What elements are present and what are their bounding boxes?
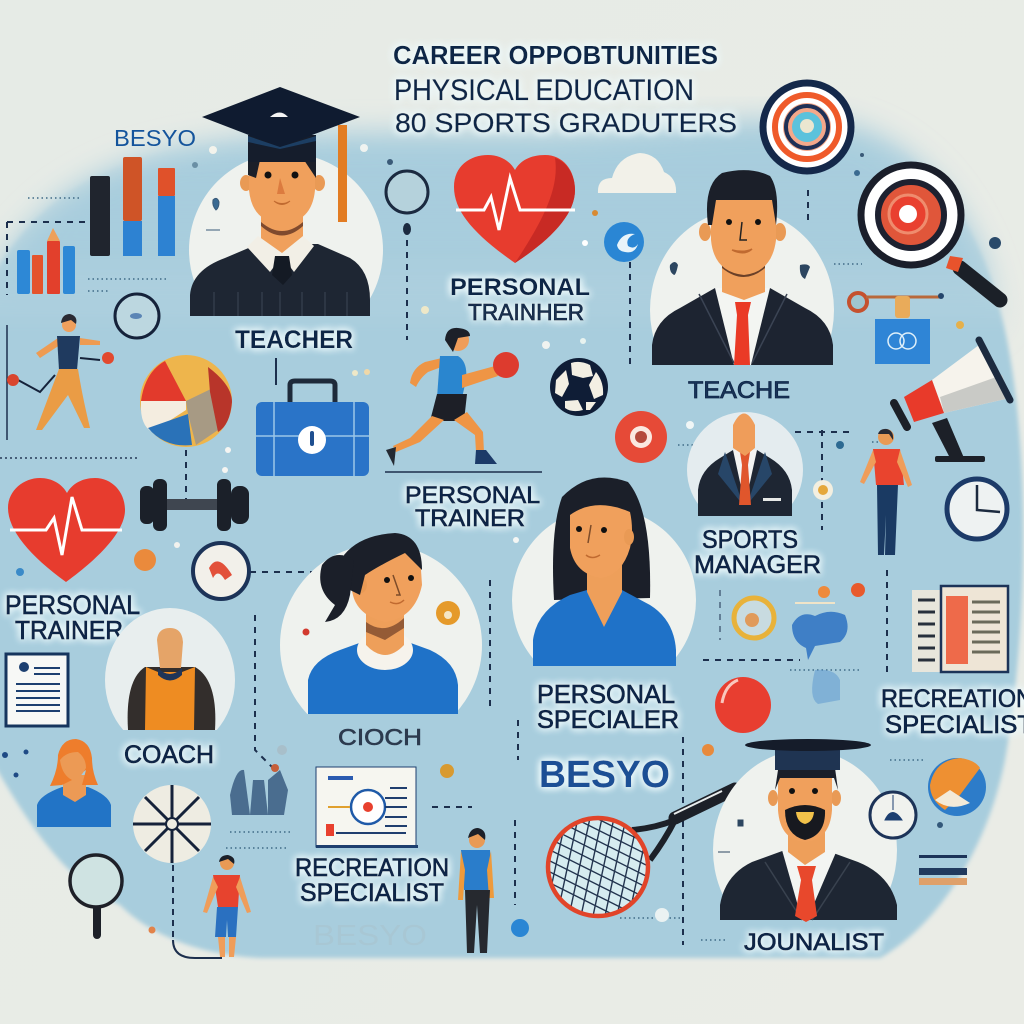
woman with long hair portrait bbox=[512, 478, 696, 666]
figure: kid red shirt bbox=[203, 855, 251, 957]
icon: pale blue shape bbox=[812, 670, 840, 704]
icon: megaphone bbox=[894, 340, 1010, 462]
icon: briefcase bbox=[256, 381, 369, 476]
label: sports manager bbox=[694, 526, 821, 579]
label: personal specialer bbox=[537, 679, 679, 734]
ring icon bbox=[115, 294, 159, 338]
label: personal specialer: PERSONAL bbox=[537, 679, 675, 709]
icon: document panel bbox=[912, 586, 1008, 672]
label: teacher: TEACHER bbox=[235, 326, 353, 354]
icon: magnifier ring bbox=[386, 171, 428, 235]
label: recreation specialist center: RECREATION bbox=[295, 854, 449, 882]
micro text marks bbox=[28, 198, 925, 940]
icon: clipboard bbox=[6, 654, 68, 726]
figure: runner bbox=[386, 328, 519, 466]
label: personal trainer middle: PERSONAL bbox=[405, 482, 540, 509]
figure: blue shirt standing bbox=[458, 828, 494, 953]
decorative specks bbox=[2, 144, 1001, 937]
figure: red shirt standing bbox=[860, 429, 912, 555]
label: sports manager: SPORTS bbox=[702, 526, 798, 554]
title: CAREER OPPOBTUNITIES bbox=[393, 40, 718, 70]
icon: heart left bbox=[8, 478, 125, 582]
woman with ponytail portrait bbox=[280, 533, 482, 714]
journalist portrait bbox=[713, 739, 897, 922]
label: cioch: CIOCH bbox=[338, 724, 422, 750]
label: personal trainer left bbox=[5, 590, 140, 645]
label: personal trainer top: PERSONAL bbox=[450, 274, 590, 301]
label: recreation specialist right bbox=[881, 685, 1024, 739]
icon: blue blob bbox=[792, 612, 848, 660]
label: journalist: JOUNALIST bbox=[744, 929, 884, 956]
label: personal trainer top bbox=[450, 274, 590, 325]
icon: magnifier bottom bbox=[70, 855, 122, 935]
icon: orange dot bbox=[134, 549, 156, 571]
label: personal trainer middle: TRAINER bbox=[415, 505, 525, 532]
teacher graduate portrait bbox=[189, 87, 383, 316]
dashed connectors bbox=[0, 190, 887, 958]
icon: stripes bbox=[919, 855, 967, 885]
icon: blue circle bbox=[604, 222, 644, 262]
label: recreation specialist center: SPECIALIST bbox=[300, 879, 444, 907]
figure with balls bbox=[7, 314, 114, 430]
bar chart: large bbox=[90, 157, 175, 256]
icon: strategy card bbox=[316, 767, 418, 848]
figure: red haired woman bbox=[37, 739, 111, 827]
label: sports manager: MANAGER bbox=[694, 551, 821, 579]
icon: heart top bbox=[454, 155, 575, 263]
bar chart: small bbox=[17, 228, 75, 294]
icon: target top bbox=[763, 83, 851, 171]
label: recreation specialist center bbox=[295, 854, 449, 907]
label: personal trainer top: TRAINHER bbox=[468, 299, 584, 325]
icon: small orange dot bbox=[702, 744, 714, 756]
title: PHYSICAL EDUCATION bbox=[394, 74, 694, 107]
label: personal trainer left: TRAINER bbox=[15, 615, 123, 645]
icon: orange blue ball bbox=[928, 758, 986, 816]
icon: clock bbox=[947, 479, 1007, 539]
icon: basketball bbox=[133, 785, 211, 863]
icon: target magnifier bbox=[861, 165, 1000, 300]
teacher suit portrait bbox=[650, 170, 834, 365]
icon: key and tag bbox=[849, 293, 944, 318]
coach portrait bbox=[105, 608, 235, 730]
icon: football bbox=[550, 358, 608, 416]
label: personal trainer middle bbox=[405, 482, 540, 532]
faint watermark label: BESYO bbox=[313, 920, 427, 952]
icon: dial bottom right bbox=[870, 792, 916, 838]
label: besyo large: BESYO bbox=[539, 754, 670, 796]
icon: dial bbox=[193, 543, 249, 599]
icon: coin bbox=[813, 480, 833, 500]
icon: cloud bbox=[598, 153, 676, 193]
icon: blue square bbox=[875, 319, 930, 364]
BESYO small label: BESYO bbox=[114, 125, 196, 151]
icon: tennis racket bbox=[546, 782, 737, 918]
background blob soft top bbox=[0, 119, 1006, 345]
label: personal trainer left: PERSONAL bbox=[5, 590, 140, 620]
title bbox=[393, 40, 737, 138]
title: 80 SPORTS GRADUTERS bbox=[395, 108, 737, 138]
icon: yellow ring bbox=[734, 598, 774, 638]
icon: dumbbell bbox=[140, 479, 249, 531]
icon: red ball bbox=[715, 677, 771, 733]
icon: orange marks bbox=[795, 583, 865, 603]
icon: red target bbox=[615, 411, 667, 463]
label: personal specialer: SPECIALER bbox=[537, 706, 679, 734]
label: teache: TEACHE bbox=[688, 377, 790, 404]
mini manager portrait bbox=[687, 412, 803, 516]
label: coach: COACH bbox=[124, 741, 214, 769]
icon: beach ball bbox=[140, 355, 232, 447]
icon: gear cluster bbox=[230, 764, 288, 815]
